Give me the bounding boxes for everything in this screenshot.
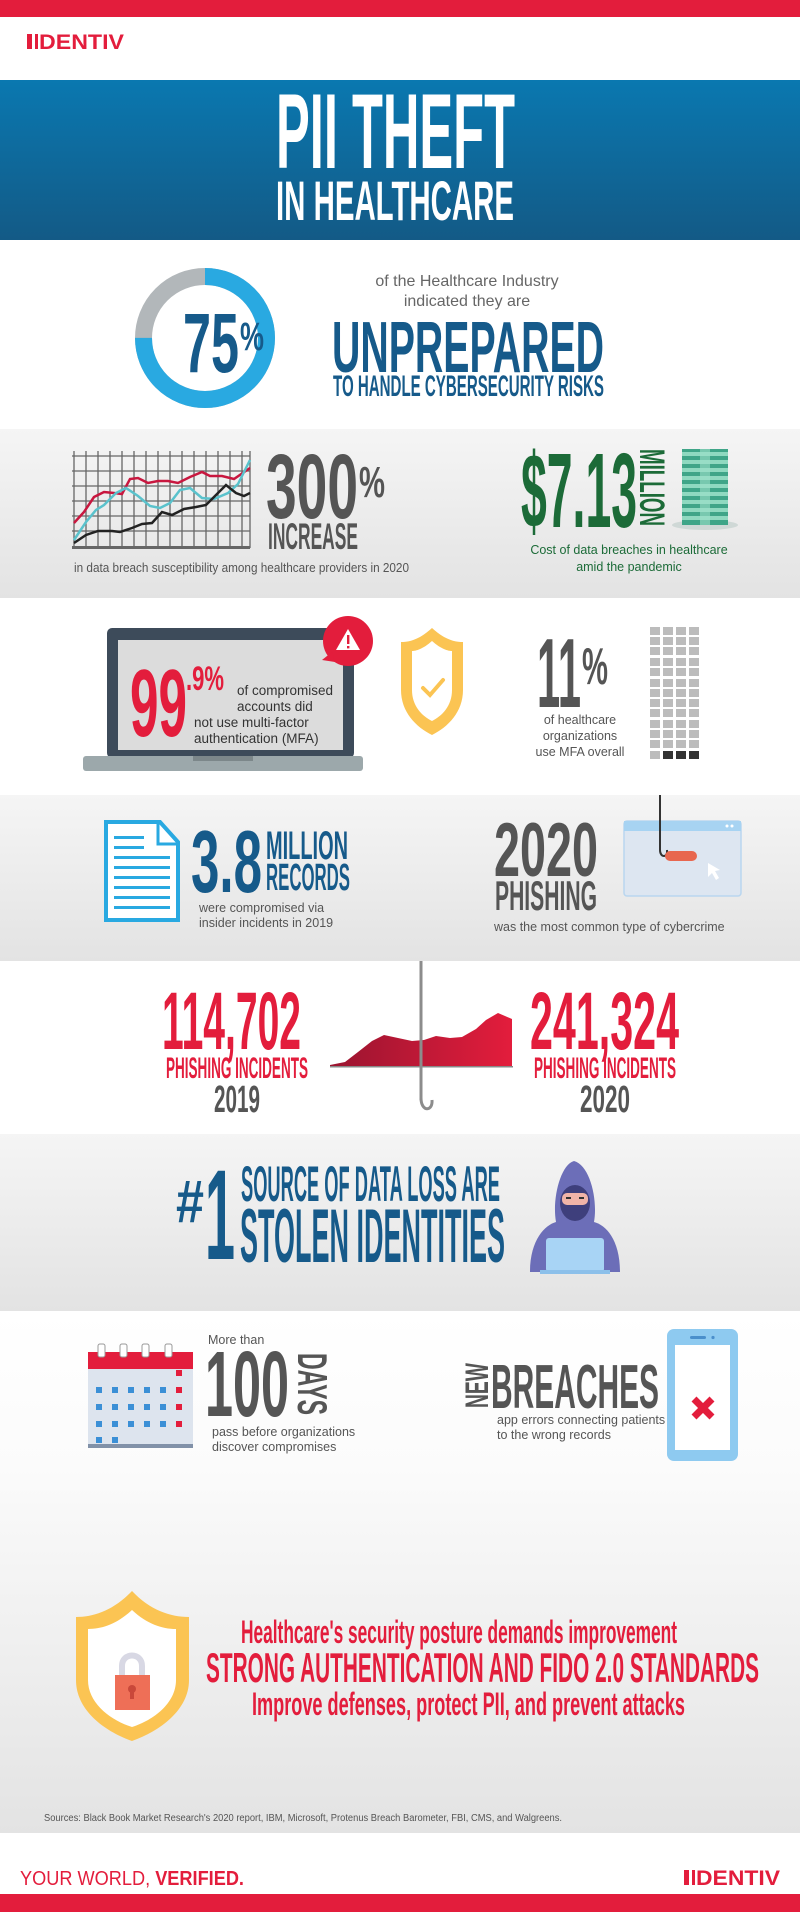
donut chart: % [240,315,264,359]
stat: $7.13 million: $7.13 [521,432,637,550]
stat: 300% increase [74,436,409,575]
panel: 75% unprepared [144,273,604,403]
stat: 2020 phishing: was the most common type of cybercrime [493,920,725,934]
stat: 100 days: discover compromises [212,1440,336,1454]
stat: 114,702: 2019 [214,1079,260,1121]
stat: 3.8 million records: were compromised via [198,901,324,915]
headline: #1 source: # [176,1168,204,1235]
stat: 300% increase: in data breach susceptibility among healthcare providers in 2020 [74,561,409,575]
stat: 11%: use MFA overall [536,745,624,759]
bottom background [0,1311,800,1833]
headline: #1 source: 1 [205,1144,235,1287]
icon: money stack [672,449,738,530]
stat: 11% [536,618,624,759]
stat: new breaches: to the wrong records [497,1428,611,1442]
icon: shield with lock [76,1591,189,1741]
bottom red bar [0,1894,800,1912]
stat: 2020 phishing [493,808,725,934]
panel: 100 days [88,1329,738,1461]
sources: Sources: Black Book Market Research's 2020 report, IBM, Microsoft, Protenus Breach Barometer, FBI, CMS, and Walgreens. [44,1813,562,1824]
stat: 114,702: 114,702 [162,976,301,1067]
stat: 300% increase: % [359,458,385,507]
icon: phone with X [667,1329,738,1461]
icon: laptop with 99.9%: of compromised [237,683,333,698]
stat: 11%: of healthcare [544,713,616,727]
panel: 300% and $7.13M [0,429,800,598]
panel: call to action [76,1591,759,1741]
stat: 100 days: pass before organizations [212,1425,355,1439]
panel: phishing incidents: PHISHING INCIDENTS [166,1052,308,1085]
tagline: YOUR WORLD, VERIFIED. [20,1868,244,1890]
stat: 114,702 [162,976,308,1121]
donut chart: 75 [183,296,239,390]
icon: laptop with 99.9%: accounts did [237,699,313,714]
stat: 100 days: More than [208,1333,264,1347]
stat: 300% increase: INCREASE [268,516,358,557]
icon: calendar [88,1344,193,1448]
icon: laptop with 99.9%: authentication (MFA) [194,731,319,746]
stat: 3.8 million records: insider incidents in 2019 [199,916,333,930]
stat: 241,324: 2020 [580,1079,630,1121]
stat: new breaches: app errors connecting patients [497,1413,665,1427]
stat: 241,324 [530,976,679,1121]
stat: 2020 phishing: PHISHING [495,872,597,919]
icon: percentage grid [650,627,699,759]
stat: 3.8 million records [191,812,350,930]
stat: $7.13 million: MILLION [632,449,671,526]
icon: laptop with 99.9%: 99 [130,650,187,757]
panel: records and phishing: RECORDS [266,857,350,899]
stat: new breaches: NEW [459,1363,495,1408]
panel: records and phishing [0,795,800,961]
logo: IDENTIV top: DENTIV [39,31,124,54]
stat: $7.13 million: amid the pandemic [576,560,682,574]
text: unprepared [332,273,604,403]
text: unprepared: of the Healthcare Industry [375,273,559,290]
stat: 300% increase: 300 [266,436,358,538]
stat: 3.8 million records: 3.8 [191,812,262,911]
icon: document [106,822,178,920]
text: unprepared: indicated they are [404,293,530,310]
stat: 100 days: 100 [205,1332,289,1436]
panel: MFA [83,616,699,771]
icon: warning bubble [322,616,373,666]
headline: #1 source [176,1144,505,1287]
stat: 2020 phishing: 2020 [494,808,598,893]
panel: phishing incidents [162,961,679,1121]
stat: $7.13 million: Cost of data breaches in healthcare [530,543,728,557]
title banner: IN HEALTHCARE [276,169,514,232]
title banner: PII THEFT [276,71,515,191]
icon: laptop with 99.9%: .9% [186,660,224,698]
stat: new breaches [459,1353,665,1442]
icon: shield check [401,628,463,735]
icon: laptop with 99.9% [83,628,363,771]
icon: hacker [530,1161,620,1274]
stat: 11%: organizations [543,729,617,743]
line chart [72,451,250,549]
title banner [0,71,800,240]
stat: 100 days: DAYS [289,1353,336,1415]
footer [0,1833,800,1894]
stat: 3.8 million records: MILLION [266,824,348,868]
donut chart [144,276,266,400]
logo: IDENTIV footer: DENTIV [696,1867,780,1890]
text: call to action [206,1614,759,1722]
icon: laptop with 99.9%: not use multi-factor [194,715,309,730]
stat: 11%: % [582,638,608,696]
stat: 11%: 11 [537,618,581,728]
stat: $7.13 million [521,432,728,574]
area chart with hook [330,961,513,1109]
top red bar [0,0,800,17]
panel: stolen identities [0,1134,800,1311]
icon: browser with hook [624,795,741,896]
